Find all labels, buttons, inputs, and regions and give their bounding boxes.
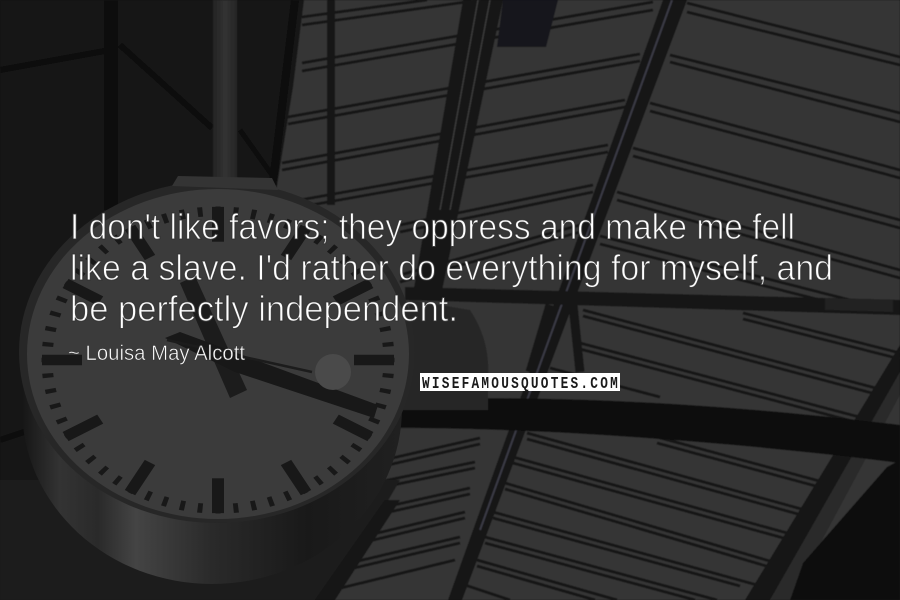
face ticks and hands: [42, 207, 394, 513]
quote text: like a slave. I'd rather do everything for myself, and: [70, 247, 833, 288]
thin vertical post: [327, 0, 335, 205]
horizontal girder: [405, 287, 900, 315]
quote text: I don't like favors; they oppress and make me fell: [70, 206, 795, 247]
clock rim: [19, 181, 415, 523]
clock mount: [172, 176, 278, 190]
attribution: ~ Louisa May Alcott: [68, 342, 245, 365]
quote text: be perfectly independent.: [70, 288, 458, 329]
hour hand: [180, 276, 247, 398]
left dark wall: [0, 0, 400, 600]
central roof beam: [448, 0, 687, 600]
quote text: [70, 206, 833, 329]
clock body: [22, 232, 402, 584]
clock face: [27, 189, 409, 519]
struts under girder: [530, 305, 580, 372]
watermark: WISEFAMOUSQUOTES.COM: [422, 373, 618, 394]
lower roof beam right: [745, 345, 900, 600]
clock: [19, 176, 415, 584]
lattice lower post: [315, 500, 400, 600]
lattice beam left: [412, 0, 503, 300]
hanging pipe: [213, 0, 237, 178]
lamp housing: [400, 300, 488, 410]
minute hand: [165, 332, 378, 418]
dark hanging box: [497, 0, 558, 47]
second hand: [167, 340, 351, 390]
curved arc beam: [400, 398, 900, 463]
